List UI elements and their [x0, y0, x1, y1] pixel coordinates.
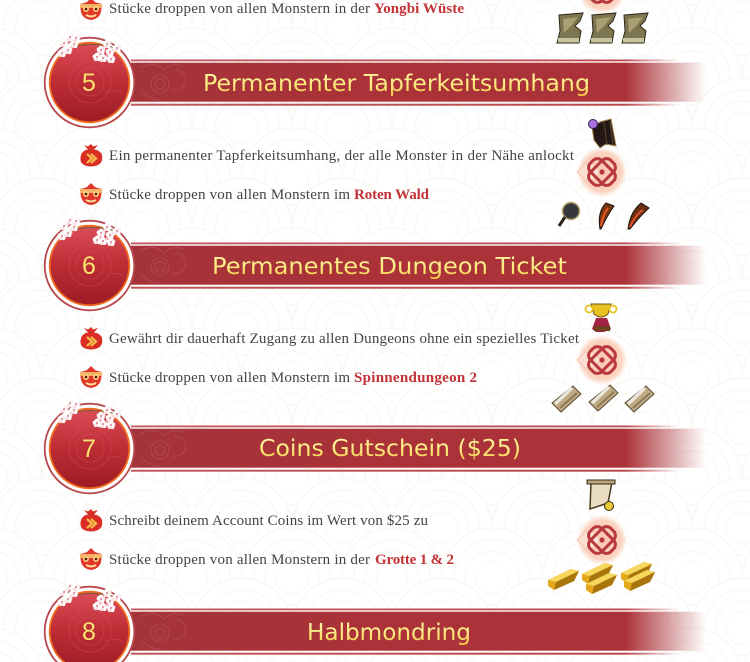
section 8	[45, 582, 713, 662]
number medal 6	[45, 216, 134, 310]
banner: section 6	[131, 242, 713, 289]
drop text	[80, 366, 477, 388]
description text	[80, 144, 575, 166]
icons: scroll pieces	[552, 385, 654, 412]
section 4 remainder	[80, 0, 648, 43]
description text	[80, 509, 428, 532]
icons: cape pieces	[559, 202, 649, 229]
drop text: Grotte 1 & 2	[375, 552, 454, 568]
number medal 8: 8	[82, 618, 96, 646]
description text	[80, 327, 580, 350]
section 5	[45, 33, 713, 229]
drop text: Stücke droppen von allen Monstern im	[109, 187, 350, 203]
item icon: cape	[588, 119, 616, 148]
item icon: scroll	[587, 480, 615, 510]
drop text: Stücke droppen von allen Monstern in der	[109, 552, 370, 568]
icons: stone tablets	[557, 13, 648, 43]
description text: Schreibt deinem Account Coins im Wert von $25 zu	[109, 513, 428, 529]
banner: section 7	[131, 426, 713, 472]
icon: knot emblem	[577, 148, 626, 196]
heading: section 6: Permanentes Dungeon Ticket	[212, 254, 567, 280]
number medal 5	[45, 33, 134, 127]
description text: Gewährt dir dauerhaft Zugang zu allen Dungeons ohne ein spezielles Ticket	[109, 331, 580, 347]
drop text: Yongbi Wüste	[80, 0, 464, 20]
number medal 6: 6	[82, 252, 96, 280]
icon: knot emblem	[577, 336, 626, 384]
icon: knot emblem	[577, 516, 626, 564]
section 6	[45, 216, 713, 412]
number medal 7: 7	[82, 435, 96, 463]
drop text	[80, 548, 454, 570]
section 7	[45, 399, 713, 594]
number medal 7	[45, 399, 134, 493]
icon: knot emblem top	[577, 0, 626, 14]
number medal 8	[45, 582, 134, 662]
drop text: Roten Wald	[354, 187, 430, 203]
banner: section 8	[131, 608, 713, 655]
number medal 5: 5	[82, 69, 96, 97]
heading: section 5: Permanenter Tapferkeitsumhang	[203, 71, 590, 97]
description text: Ein permanenter Tapferkeitsumhang, der alle Monster in der Nähe anlockt	[109, 148, 575, 164]
item icon: trophy	[586, 304, 616, 332]
drop text: Yongbi Wüste: Stücke droppen von allen Monstern in der	[109, 1, 370, 17]
drop text	[80, 183, 430, 205]
heading: section 8: Halbmondring	[307, 620, 471, 646]
icons: gold bars	[548, 562, 655, 594]
drop text: Yongbi Wüste: Yongbi Wüste	[374, 1, 464, 17]
drop text: Spinnendungeon 2	[354, 370, 477, 386]
drop text: Stücke droppen von allen Monstern im	[109, 370, 350, 386]
heading: section 7: Coins Gutschein ($25)	[259, 436, 521, 462]
banner: section 5	[131, 60, 713, 106]
